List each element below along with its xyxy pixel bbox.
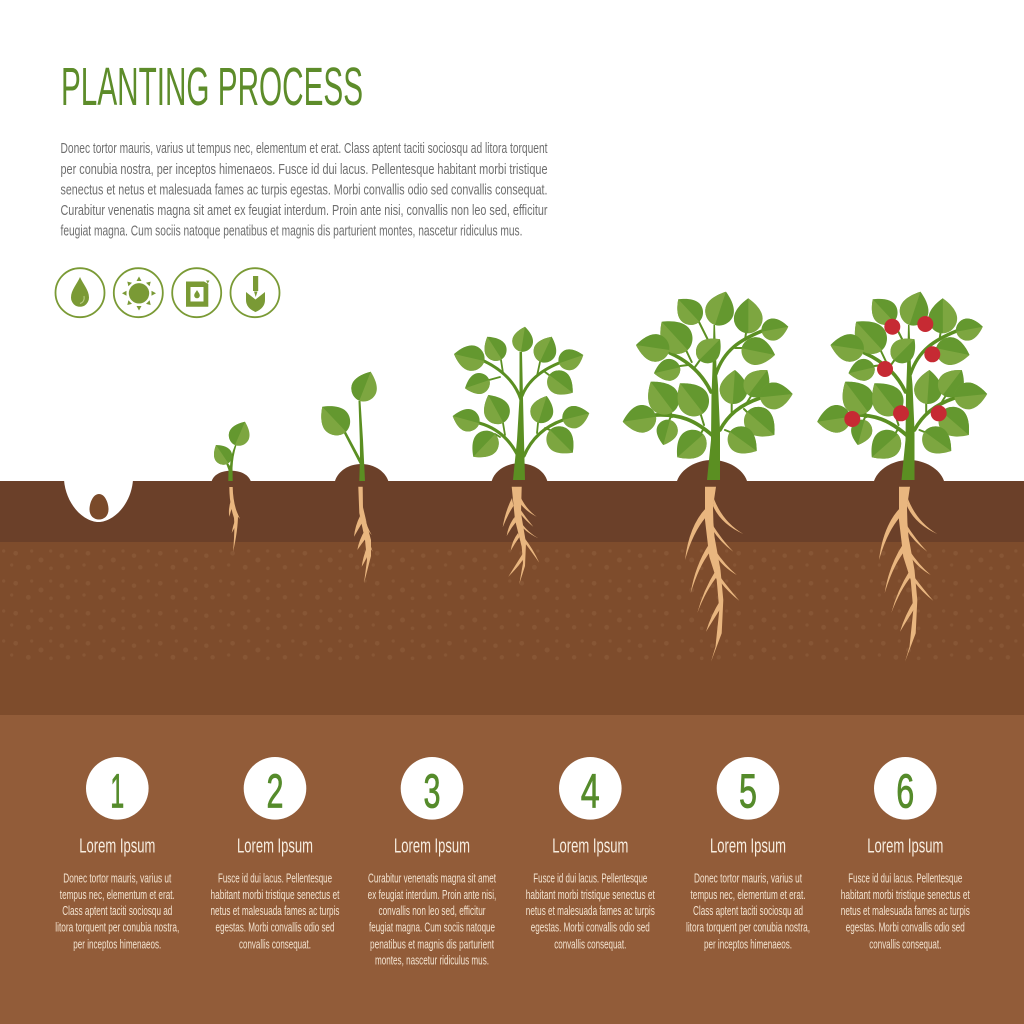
step 1: tempus nec, elementum et erat. bbox=[60, 888, 175, 902]
step 2: habitant morbi tristique senectus et bbox=[210, 888, 340, 902]
step 5: litora torquent per conubia nostra, bbox=[686, 921, 810, 935]
step 6 bbox=[841, 757, 970, 951]
step 2: egestas. Morbi convallis odio sed bbox=[216, 921, 335, 935]
stage 2: sprout bbox=[208, 418, 255, 552]
step 5 bbox=[686, 757, 810, 951]
step 5: Class aptent taciti sociosqu ad bbox=[693, 904, 803, 918]
step 4: Fusce id dui lacus. Pellentesque bbox=[533, 871, 647, 885]
intro text block: Donec tortor mauris, varius ut tempus nec, elementum et erat. Class aptent taciti sociosqu ad litora torquent bbox=[60, 140, 548, 157]
step 5: 5 bbox=[739, 766, 757, 818]
step 4 bbox=[526, 757, 655, 951]
step 1: 1 bbox=[110, 766, 124, 818]
stage 5: mature plant bbox=[621, 287, 794, 662]
step 3: 3 bbox=[424, 766, 440, 818]
stage 3: seedling bbox=[312, 367, 388, 583]
step 4: netus et malesuada fames ac turpis bbox=[526, 904, 655, 918]
step 3: Lorem Ipsum bbox=[394, 834, 470, 858]
step 4: egestas. Morbi convallis odio sed bbox=[531, 921, 650, 935]
step 5: Donec tortor mauris, varius ut bbox=[694, 871, 802, 885]
step 2: netus et malesuada fames ac turpis bbox=[210, 904, 340, 918]
step 5: Lorem Ipsum bbox=[710, 834, 786, 858]
icon: fertilizer bag bbox=[172, 268, 221, 317]
step 1: litora torquent per conubia nostra, bbox=[55, 921, 179, 935]
step 4: 4 bbox=[581, 766, 600, 818]
icon: water drop bbox=[56, 268, 104, 317]
step 4: convallis consequat. bbox=[554, 937, 626, 951]
step 5: tempus nec, elementum et erat. bbox=[690, 888, 806, 902]
title: PLANTING PROCESS bbox=[61, 57, 363, 117]
step 4: habitant morbi tristique senectus et bbox=[526, 888, 655, 902]
step 6: Lorem Ipsum bbox=[867, 834, 943, 858]
step 6: Fusce id dui lacus. Pellentesque bbox=[848, 871, 962, 885]
stage 4: young plant bbox=[450, 325, 592, 584]
step 3: convallis non leo sed, efficitur bbox=[378, 904, 486, 918]
step 6: convallis consequat. bbox=[869, 937, 941, 951]
red berries bbox=[844, 316, 947, 427]
step 1 bbox=[55, 757, 179, 951]
intro text block: feugiat magna. Cum sociis natoque penatibus et magnis dis parturient montes, nascetur ridiculus mus. bbox=[60, 222, 522, 240]
intro text block: Curabitur venenatis magna sit amet ex feugiat interdum. Proin ante nisi, convallis non leo sed, efficitur bbox=[60, 202, 548, 219]
step 1: Donec tortor mauris, varius ut bbox=[63, 871, 172, 885]
step 3 bbox=[368, 757, 496, 967]
intro text block: senectus et netus et malesuada fames ac turpis egestas. Morbi convallis odio sed convallis consequat. bbox=[60, 182, 548, 198]
step 3: Curabitur venenatis magna sit amet bbox=[368, 871, 496, 885]
step 5: per inceptos himenaeos. bbox=[704, 937, 792, 951]
step 2 bbox=[210, 757, 340, 951]
step 2: convallis consequat. bbox=[239, 937, 311, 951]
step 2: Lorem Ipsum bbox=[237, 834, 313, 858]
step 1: Lorem Ipsum bbox=[79, 834, 155, 858]
step 3: ex feugiat interdum. Proin ante nisi, bbox=[368, 888, 496, 902]
step 3: penatibus et magnis dis parturient bbox=[370, 937, 494, 951]
intro text block bbox=[60, 140, 548, 240]
step 4: Lorem Ipsum bbox=[552, 834, 628, 858]
step 2: 2 bbox=[266, 766, 284, 818]
intro text block: per conubia nostra, per inceptos himenaeos. Fusce id dui lacus. Pellentesque habitant morbi tristique bbox=[60, 161, 548, 178]
stage 6: fruiting plant bbox=[815, 287, 989, 662]
stage 1: seed in planting hole bbox=[64, 480, 133, 522]
icon: sun bbox=[114, 268, 163, 317]
step 3: montes, nascetur ridiculus mus. bbox=[375, 953, 489, 967]
icon row bbox=[56, 268, 280, 317]
panel: soil background bbox=[0, 481, 1024, 1024]
step 6: 6 bbox=[896, 766, 914, 818]
step 1: per inceptos himenaeos. bbox=[73, 937, 161, 951]
icon: garden trowel bbox=[230, 268, 280, 317]
step 3: feugiat magna. Cum sociis natoque bbox=[369, 921, 495, 935]
step 1: Class aptent taciti sociosqu ad bbox=[62, 904, 172, 918]
step 2: Fusce id dui lacus. Pellentesque bbox=[218, 871, 332, 885]
